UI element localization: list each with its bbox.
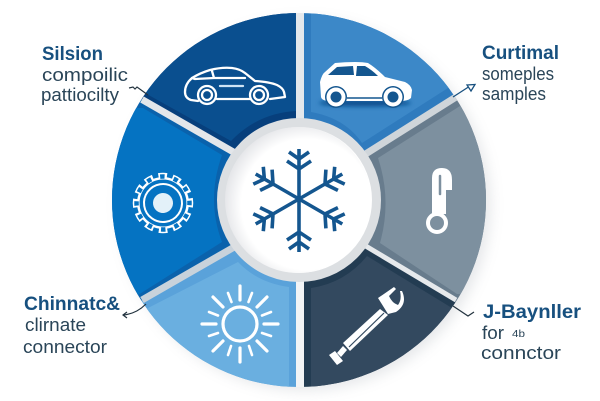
label: bottom-left: clirnate [25, 315, 86, 335]
label: bottom-right: for [482, 323, 504, 343]
icon: car outline [185, 68, 285, 104]
label: top-left: compoilic [42, 65, 128, 85]
label: bottom-right [481, 302, 582, 363]
label: bottom-right: 4b [512, 329, 526, 340]
icon: white car [319, 62, 412, 108]
label: bottom-left: Chinnatc& [24, 294, 120, 315]
label: top-right: Curtimal [482, 43, 559, 64]
label: bottom-right: J-Baynller [483, 302, 582, 323]
label: top-right: someples [482, 64, 554, 84]
icon: snowflake [250, 149, 348, 252]
panel: bottom-left segment [142, 250, 296, 387]
label: bottom-right: connctor [481, 343, 561, 363]
panel: top-left segment [142, 13, 296, 149]
center ring [222, 122, 376, 278]
icon: sun [202, 286, 278, 362]
arrow: bottom-left leader [123, 304, 146, 318]
icon: wrench [329, 287, 404, 365]
icon: gear [132, 172, 194, 234]
arrow: top-right leader [453, 84, 475, 97]
panel: top-right segment [304, 13, 456, 151]
label: top-left: pattiocilty [41, 85, 119, 105]
arrow: top-left leader [129, 87, 148, 95]
label: top-right [482, 43, 559, 104]
icon: thermometer [428, 168, 452, 232]
donut chart [112, 13, 486, 387]
arrow: bottom-right leader [453, 306, 474, 316]
label: bottom-left [23, 294, 120, 357]
panel: left segment [112, 99, 231, 301]
panel: right segment [368, 98, 486, 302]
label: top-right: samples [482, 84, 546, 104]
label: top-left: Silsion [42, 44, 103, 65]
label: bottom-left: connector [23, 337, 107, 357]
panel: bottom-right segment [304, 248, 456, 387]
label: top-left [41, 44, 128, 105]
